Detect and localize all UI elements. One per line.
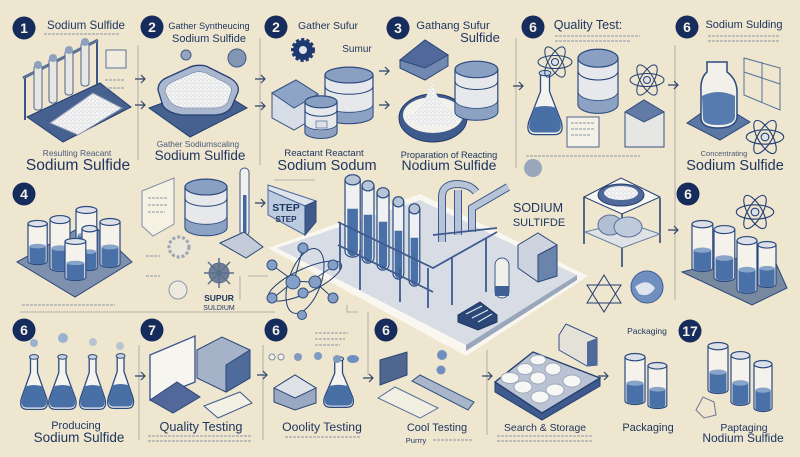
badge 2: 2 xyxy=(148,19,156,35)
caption xyxy=(702,422,784,445)
badge 2 xyxy=(264,16,288,38)
star icon xyxy=(587,275,621,312)
panel dividers xyxy=(20,38,675,440)
jars xyxy=(625,354,667,409)
caption: Reactant Reactant xyxy=(284,148,364,159)
plant label xyxy=(513,201,565,229)
panel 9: quality testing xyxy=(264,318,362,437)
heading: Packaging xyxy=(627,326,667,336)
badge 2: 2 xyxy=(272,19,280,35)
STEP block xyxy=(268,185,316,235)
steel frame xyxy=(338,222,497,308)
faded badge xyxy=(524,159,542,177)
caption: Sodium Sulfide xyxy=(686,158,784,174)
heading: Quality Test: xyxy=(554,18,622,32)
caption: Nodium Sulfide xyxy=(402,157,497,173)
STEP block: STEP xyxy=(276,215,297,224)
box, dish and drum xyxy=(399,40,498,142)
jars xyxy=(28,206,120,281)
panel: jars right xyxy=(676,182,787,305)
badge 3 xyxy=(386,16,410,40)
caption: Resulting Reacant xyxy=(43,148,112,158)
panel 13: packaging sodium sulfide xyxy=(678,320,784,445)
caption: Quality Testing xyxy=(160,420,242,434)
sulfur icons and labels: SULDIUM xyxy=(203,305,235,312)
panel 12: packaging xyxy=(622,326,674,434)
plant label: SULTIFDE xyxy=(513,217,565,229)
badge 6 xyxy=(522,16,544,38)
heading: Sodium Sulding xyxy=(705,19,783,31)
flasks xyxy=(21,333,134,409)
document xyxy=(142,178,174,236)
caption: Sodium Sulfide xyxy=(26,157,130,174)
atom xyxy=(630,62,664,98)
label box xyxy=(559,324,597,366)
badge 1 xyxy=(12,16,36,40)
atom xyxy=(736,192,774,232)
heading: Sodium Sulfide xyxy=(172,33,246,45)
flask xyxy=(528,70,562,135)
rack and tray xyxy=(23,38,131,142)
machine unit xyxy=(518,233,557,282)
caption: Proparation of Reacting xyxy=(401,150,497,160)
jars xyxy=(708,343,772,411)
heading xyxy=(416,20,500,45)
caption: Paptaging xyxy=(720,422,768,434)
pipes xyxy=(442,184,508,242)
caption: Ooolity Testing xyxy=(282,420,362,434)
table with bowl xyxy=(584,178,660,267)
panel 8: quality testing xyxy=(140,318,252,441)
caption: Sodium Sulfide xyxy=(155,148,245,163)
caption: Gather Sodiumscaling xyxy=(157,139,240,149)
caption: Cool Testing xyxy=(407,422,467,434)
panel 3: gather sulfur xyxy=(264,16,377,174)
molecule xyxy=(264,243,346,320)
globe icon xyxy=(631,271,663,303)
caption: Search & Storage xyxy=(504,423,586,434)
badge 6: 6 xyxy=(529,19,537,35)
plant label: SODIUM xyxy=(513,201,563,215)
panel 11: storage tray xyxy=(495,324,600,441)
tray xyxy=(495,352,600,420)
monitor, cabinet and sheet xyxy=(150,336,252,418)
STEP block: STEP xyxy=(272,202,300,214)
plate xyxy=(17,222,132,297)
drum xyxy=(578,49,618,113)
caption xyxy=(34,420,124,445)
badge 6 xyxy=(676,16,698,38)
badge 6: 6 xyxy=(382,322,390,338)
panel 1: sodium sulfide rack xyxy=(12,16,131,174)
dark step block xyxy=(458,302,497,330)
caption: Sodium Sodum xyxy=(277,158,377,174)
panel 10: cool testing xyxy=(374,318,474,445)
containers xyxy=(272,67,373,138)
caption: Nodium Sulfide xyxy=(702,431,784,445)
badge 1: 1 xyxy=(20,20,28,36)
caption: Producing xyxy=(51,420,101,432)
gear icon xyxy=(293,40,313,60)
data card and box xyxy=(567,100,664,147)
badge 6: 6 xyxy=(684,186,692,202)
panel 7: producing flasks xyxy=(12,318,134,445)
badge 6: 6 xyxy=(20,322,28,338)
jars xyxy=(692,221,776,293)
caption: Sodium Sulfide xyxy=(34,430,124,445)
caption: Packaging xyxy=(622,422,674,434)
arrows xyxy=(135,67,678,382)
heading: Gathang Sufur xyxy=(416,20,490,32)
badge 3: 3 xyxy=(394,20,402,36)
bottle on plate xyxy=(687,58,780,140)
caption xyxy=(406,422,472,445)
badge 6: 6 xyxy=(683,19,691,35)
center platform xyxy=(268,194,588,356)
atom left xyxy=(538,44,572,80)
panel 6: sodium sulfiding xyxy=(676,16,784,174)
drum and thermometer xyxy=(185,168,263,258)
badge 7: 7 xyxy=(148,322,156,338)
atom xyxy=(746,117,784,157)
badge 4: 4 xyxy=(20,186,28,202)
caption xyxy=(277,148,377,174)
badge 6: 6 xyxy=(272,322,280,338)
caption xyxy=(26,148,130,174)
caption: Concentrating xyxy=(701,149,747,158)
machine and flask xyxy=(269,352,359,410)
badge 17: 17 xyxy=(682,323,698,339)
panel 4: gathering sulfur xyxy=(386,16,500,173)
caption xyxy=(401,150,497,173)
heading: Sodium Sulfide xyxy=(47,19,125,32)
caption xyxy=(155,139,245,163)
heading: Gather Sufur xyxy=(298,20,359,32)
label: Sumur xyxy=(342,44,372,55)
heading xyxy=(168,21,250,45)
cool tray and sheet xyxy=(378,350,474,418)
sulfur icons and labels: SUPUR xyxy=(204,293,234,303)
panel 2: synthesizing xyxy=(140,16,250,163)
heading: Gather Syntheucing xyxy=(168,21,250,31)
tubes xyxy=(345,175,420,286)
plate xyxy=(682,250,787,305)
badge 2 xyxy=(140,16,164,38)
central reactor plant xyxy=(338,175,557,330)
pan on base xyxy=(149,49,247,137)
caption xyxy=(686,149,784,174)
crystal icon xyxy=(696,397,716,418)
cylinder xyxy=(495,258,509,298)
caption: Purrry xyxy=(406,436,426,445)
panel 5: quality test xyxy=(522,16,664,177)
heading: Sulfide xyxy=(460,30,500,45)
sulfur icons and labels xyxy=(146,237,235,312)
panel 4b: jars on plate xyxy=(12,182,132,305)
